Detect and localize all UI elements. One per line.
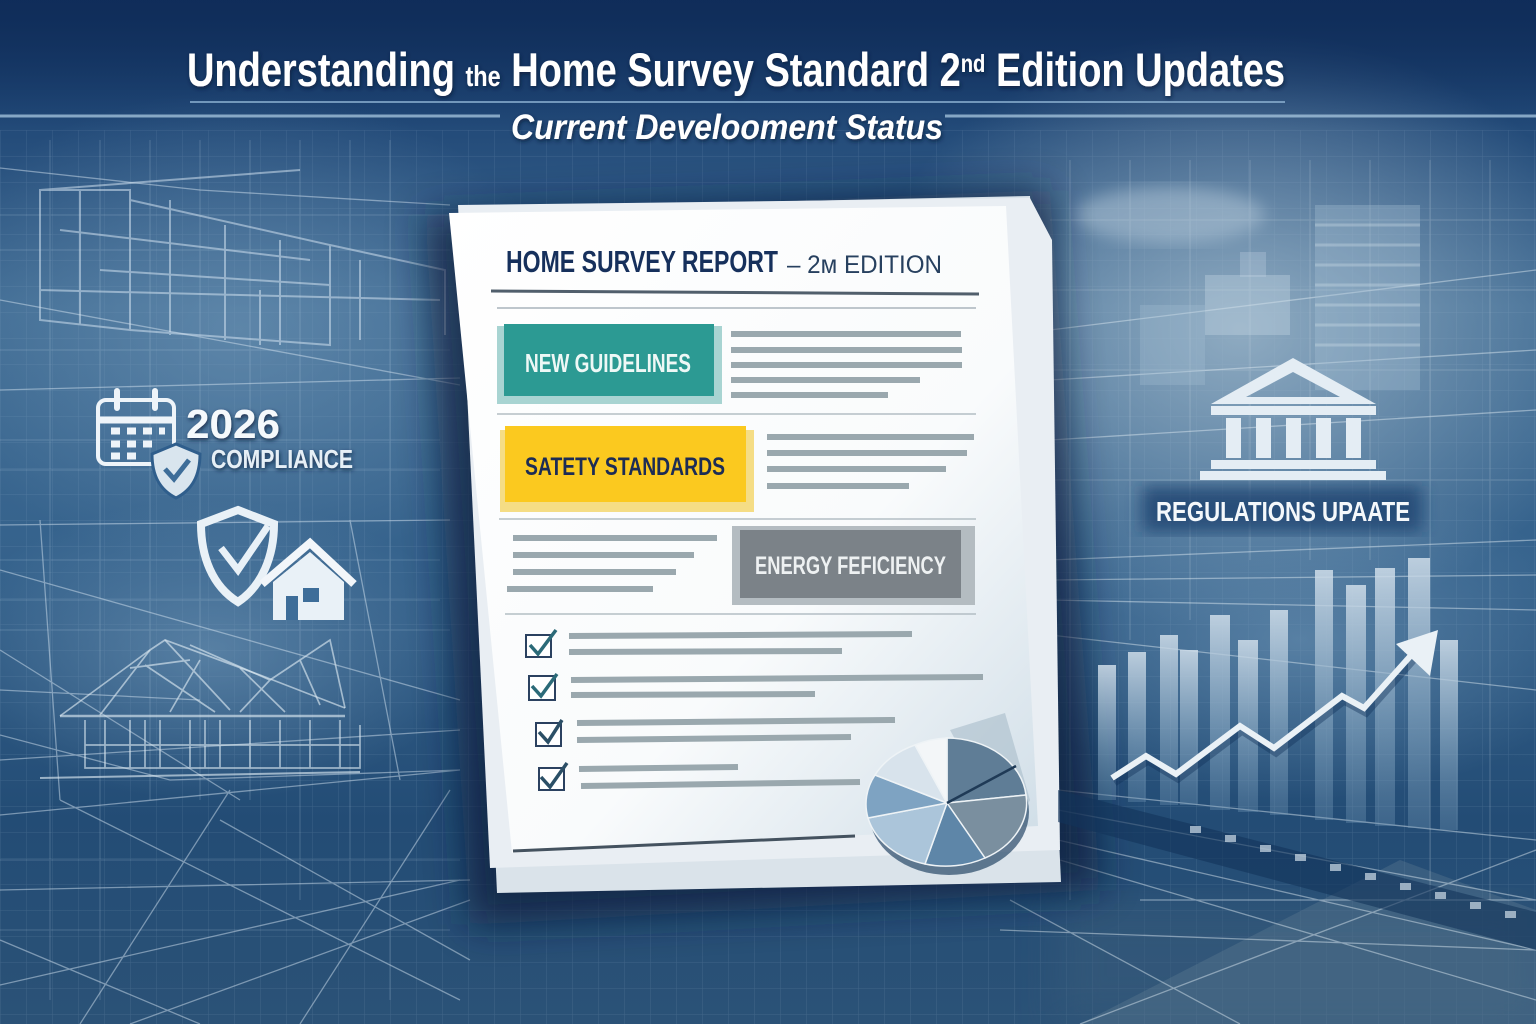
arrow: rising trend bbox=[1112, 630, 1438, 782]
report heading bbox=[491, 244, 979, 308]
callout: regulations update bbox=[1142, 358, 1422, 532]
blueprint lines: left side bbox=[0, 140, 470, 1024]
blueprint lines: right side bbox=[1000, 160, 1536, 1024]
tag: energy efficiency: ENERGY FEFICIENCY bbox=[755, 552, 946, 580]
document stack bbox=[425, 190, 1100, 925]
tag: energy efficiency bbox=[732, 526, 975, 605]
tag: safety standards: SATETY STANDARDS bbox=[525, 453, 725, 481]
check item 4 bbox=[539, 763, 860, 790]
icon: shield and house bbox=[201, 510, 354, 620]
back sheet lower bbox=[466, 196, 1061, 893]
tag: safety standards bbox=[500, 426, 754, 512]
checklist bbox=[526, 630, 983, 790]
icon: shield check bbox=[152, 444, 200, 498]
title: Edition Updates bbox=[985, 43, 1285, 96]
check item 1 bbox=[526, 630, 912, 657]
callout: 2026 compliance bbox=[98, 391, 353, 498]
tag: new guidelines: NEW GUIDELINES bbox=[525, 348, 691, 378]
text lines: energy efficiency bbox=[507, 535, 717, 592]
check item 2 bbox=[529, 674, 983, 700]
divider bbox=[499, 518, 976, 520]
title: Understanding the Home Survey Standard 2 bbox=[187, 43, 1070, 96]
icon: government building bbox=[1200, 358, 1386, 480]
pie chart bbox=[866, 713, 1030, 875]
bars bbox=[1098, 558, 1458, 830]
divider bbox=[505, 613, 976, 615]
bar chart with rising arrow bbox=[1098, 558, 1458, 830]
background city skyline and cloud bbox=[1075, 187, 1420, 390]
label: regulations update: REGULATIONS UPAATE bbox=[1156, 496, 1410, 527]
stack shadow bbox=[425, 190, 1100, 925]
divider bbox=[497, 413, 976, 415]
title divider lines bbox=[0, 102, 1536, 116]
title: nd bbox=[961, 50, 985, 78]
label: 2026: 2026 bbox=[186, 401, 280, 447]
report heading: HOME SURVEY REPORT bbox=[506, 244, 778, 279]
background house sketch bbox=[40, 640, 360, 778]
bottom rule bbox=[513, 836, 855, 851]
back sheet middle bbox=[458, 198, 1060, 868]
tag: new guidelines bbox=[497, 324, 722, 404]
label: compliance: COMPLIANCE bbox=[211, 444, 353, 474]
front sheet bbox=[449, 206, 1038, 853]
label: regulations update bbox=[1142, 486, 1422, 532]
report heading: – 2ᴍ EDITION bbox=[787, 251, 942, 279]
text lines: new guidelines bbox=[731, 331, 962, 398]
text lines: safety standards bbox=[767, 434, 974, 489]
film strip floor band bbox=[1058, 790, 1536, 950]
icon: calendar bbox=[98, 391, 174, 464]
subtitle: Current Develooment Status bbox=[511, 108, 943, 147]
check item 3 bbox=[536, 720, 895, 746]
